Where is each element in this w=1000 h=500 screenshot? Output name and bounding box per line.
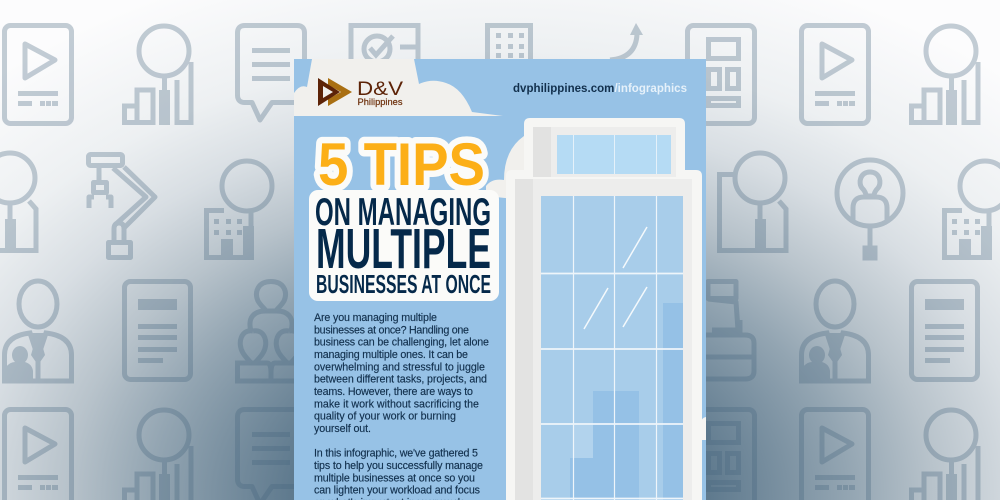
icon: document <box>912 282 978 380</box>
pale building <box>573 425 593 458</box>
website url: dvphilippines.com/infographics <box>513 83 687 95</box>
second paragraph: In this infographic, we've gathered 5 <box>314 448 478 460</box>
lower storey shadow strip <box>515 179 533 500</box>
title: businesses at once: BUSINESSES AT ONCE <box>316 269 491 299</box>
intro paragraph: between different tasks, projects, and <box>314 374 487 386</box>
logo wordmark: D&V <box>357 79 403 100</box>
intro paragraph: yourself out. <box>314 423 371 435</box>
lower storey wall <box>515 179 692 500</box>
icon: group of people <box>238 282 304 381</box>
reflected skyline bars <box>570 303 683 500</box>
building halo <box>506 118 702 500</box>
intro paragraph: businesses at once? Handling one <box>314 324 469 336</box>
intro paragraph: make it work without sacrificing the <box>314 398 479 410</box>
intro paragraph: Are you managing multiple <box>314 312 437 324</box>
icon: person in suit <box>4 281 72 381</box>
icon: layout page <box>688 410 754 500</box>
icon: stacked items <box>690 282 754 379</box>
icon: magnifier chart <box>124 410 191 500</box>
intro paragraph: teams. However, there are ways to <box>314 386 473 398</box>
icon: magnifier document <box>720 153 786 252</box>
icon: magnifier person <box>837 160 903 258</box>
icon: magnifier document <box>0 153 36 252</box>
icon: growth arrow <box>610 23 643 60</box>
icon: video page <box>802 26 868 124</box>
upper storey wall <box>533 127 676 177</box>
icon: magnifier building <box>944 161 1000 260</box>
icon: logo arrows <box>318 78 352 106</box>
second paragraph: can lighten your workload and focus <box>314 485 480 497</box>
second paragraph <box>314 448 483 500</box>
icon: magnifier chart <box>912 410 978 500</box>
icon: video page <box>4 410 72 500</box>
icon: robotic arm <box>88 154 155 258</box>
icon: checklist <box>351 23 420 70</box>
icon: speech bubble <box>238 26 304 120</box>
logo subtitle: Philippines <box>358 97 403 107</box>
upper window <box>557 135 671 174</box>
poster panel <box>294 59 706 500</box>
intro paragraph: overwhelming and stressful to juggle <box>314 361 485 373</box>
intro paragraph: business can be challenging, let alone <box>314 337 489 349</box>
cloud at right edge <box>702 417 706 440</box>
icon: layout page <box>688 26 754 124</box>
second paragraph: multiple businesses at once so you <box>314 472 475 484</box>
window frame lines <box>541 196 683 500</box>
icon: video page <box>4 26 72 124</box>
icon: magnifier building <box>206 161 272 260</box>
icon: video page <box>802 410 868 500</box>
title: multiple: MULTIPLE <box>316 217 491 281</box>
icon: magnifier chart <box>124 26 191 125</box>
title block <box>309 131 499 301</box>
icon: building <box>488 26 530 76</box>
header cloud <box>294 59 503 116</box>
title: 5 TIPS: 5 TIPS <box>318 131 485 198</box>
window glints <box>584 227 647 329</box>
icon: document <box>124 282 190 380</box>
cloud behind building <box>486 136 524 200</box>
icon: person in suit <box>802 281 868 381</box>
building illustration <box>506 118 702 500</box>
intro paragraph: quality of your work or burning <box>314 411 456 423</box>
title: on managing: ON MANAGING <box>315 191 491 234</box>
title white backing <box>309 190 499 301</box>
intro paragraph <box>314 312 489 435</box>
second paragraph: tips to help you successfully manage <box>314 460 483 472</box>
icon: magnifier chart <box>912 26 978 125</box>
logo <box>318 78 403 107</box>
intro paragraph: managing multiple ones. It can be <box>314 349 468 361</box>
lower window <box>541 196 683 500</box>
upper storey shadow strip <box>533 127 551 177</box>
icon: speech bubble <box>238 410 304 500</box>
